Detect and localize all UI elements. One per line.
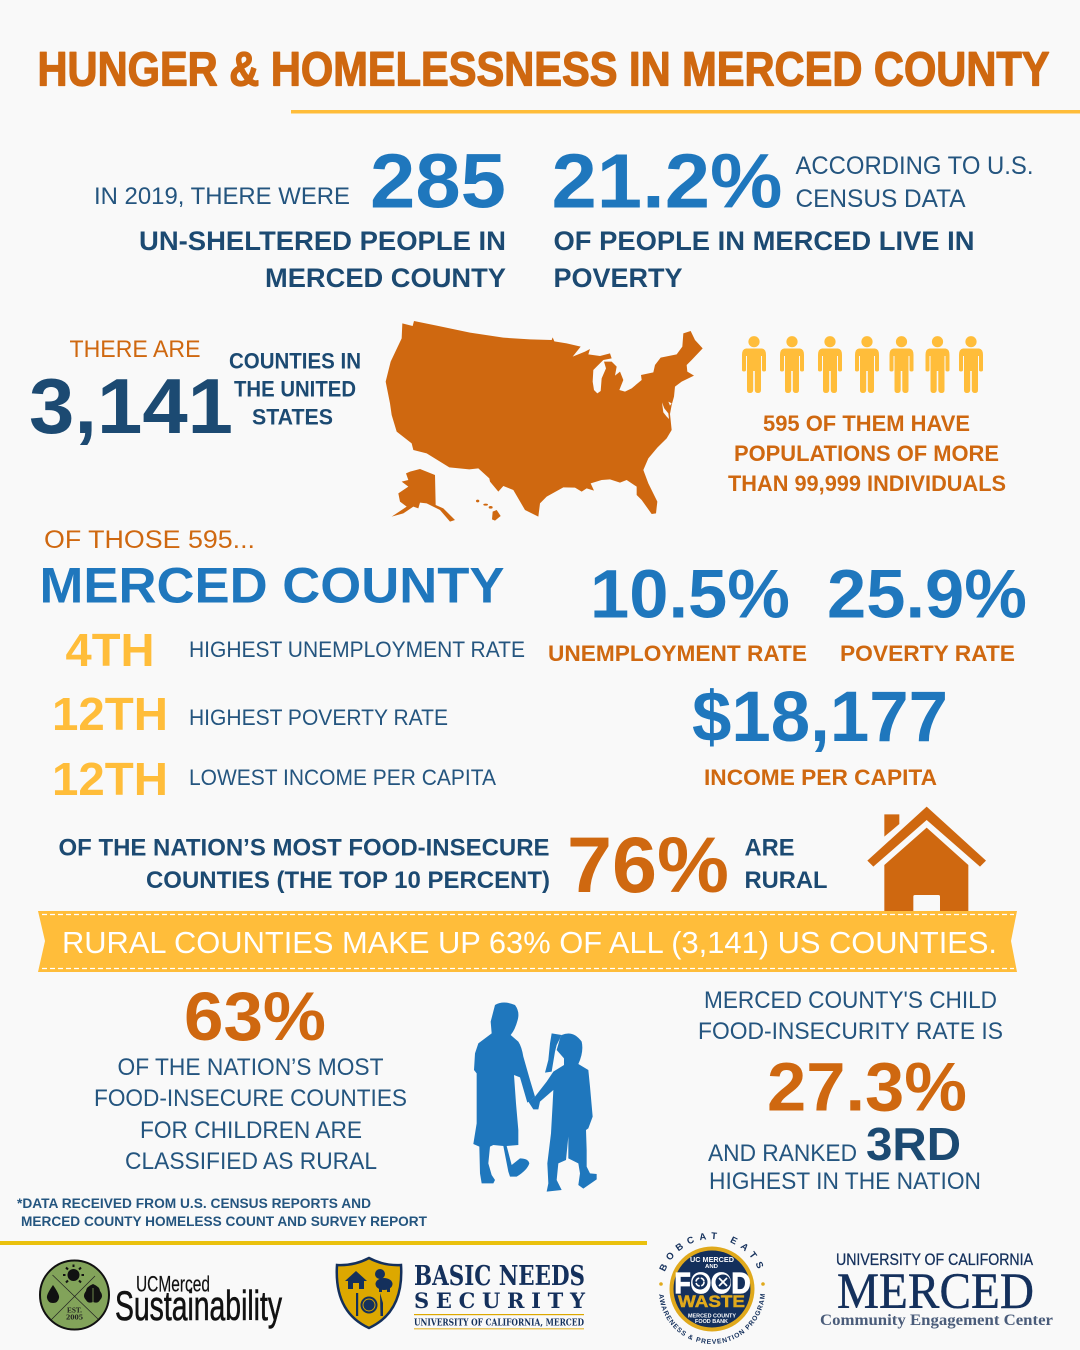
rank: 12th poverty: 12TH xyxy=(52,688,168,740)
banner: rural counties: RURAL COUNTIES MAKE UP 63% OF ALL (3,141) US COUNTIES. xyxy=(62,925,997,960)
stat: 76% rural: OF THE NATION’S MOST FOOD-INSECURE xyxy=(58,834,550,862)
logo: UC Merced Sustainability: UCMerced xyxy=(136,1272,210,1296)
text: 595 counties: THAN 99,999 INDIVIDUALS xyxy=(728,471,1006,496)
logo: Bobcat Eats Food Waste xyxy=(659,1232,765,1344)
logo: Basic Needs Security: SECURITY xyxy=(414,1288,586,1313)
stat: 3,141 counties: COUNTIES IN xyxy=(229,348,361,374)
stat: 25.9% poverty xyxy=(827,556,1027,666)
rank: 12th income xyxy=(52,753,496,805)
logo: Bobcat Eats Food Waste: UC MERCED xyxy=(690,1255,735,1264)
logo: UC Merced Community Engagement Center: UNIVERSITY OF CALIFORNIA xyxy=(836,1250,1034,1269)
logo: UC Merced Sustainability: Sustainability xyxy=(115,1282,282,1329)
panel: Merced County rankings xyxy=(40,526,525,805)
illustration: two children holding hands xyxy=(473,1002,597,1192)
stat: 63% of child food-insecure counties: CLASSIFIED AS RURAL xyxy=(125,1148,377,1175)
logo: UC Merced Sustainability: 2005 xyxy=(66,1314,84,1322)
stat: 76% rural: 76% xyxy=(567,820,729,909)
logo: Bobcat Eats Food Waste: AND xyxy=(705,1264,718,1270)
logo: Basic Needs Security: UNIVERSITY OF CALIFORNIA, MERCED xyxy=(414,1318,584,1328)
stat: 10.5% unemployment: UNEMPLOYMENT RATE xyxy=(548,641,807,666)
stat: 21.2% in poverty: 21.2% xyxy=(552,138,782,224)
rank: 4th unemployment: HIGHEST UNEMPLOYMENT RATE xyxy=(189,637,525,662)
map of the United States xyxy=(386,321,703,522)
banner: rural counties xyxy=(38,911,1017,972)
stat: 21.2% in poverty: OF PEOPLE IN MERCED LIVE IN xyxy=(554,226,974,256)
rank: 12th poverty: HIGHEST POVERTY RATE xyxy=(189,705,448,730)
stat: 3,141 counties: THERE ARE xyxy=(70,336,200,363)
stat: 63% of child food-insecure counties: 63% xyxy=(184,978,326,1055)
rank: 4th unemployment: 4TH xyxy=(66,624,154,676)
logo: Bobcat Eats Food Waste: AWARENESS & PREVENTION PROGRAM xyxy=(659,1294,765,1344)
stat: 3,141 counties: 3,141 xyxy=(29,362,233,450)
stat: 3,141 counties: THE UNITED xyxy=(234,376,356,402)
stat: 76% rural: ARE xyxy=(744,834,794,862)
stat: 285 unsheltered people xyxy=(94,138,506,293)
logo: Bobcat Eats Food Waste: WASTE xyxy=(678,1292,745,1311)
stat: 21.2% in poverty xyxy=(552,138,1034,293)
text: 595 counties: POPULATIONS OF MORE xyxy=(734,441,999,466)
logo: Bobcat Eats Food Waste: FOOD xyxy=(674,1268,750,1300)
stat: child food-insecurity 27.3%: 27.3% xyxy=(767,1048,967,1126)
footnote: data sources: MERCED COUNTY HOMELESS COUNT AND SURVEY REPORT xyxy=(21,1214,428,1229)
logo: UC Merced Community Engagement Center: Community Engagement Center xyxy=(820,1312,1053,1329)
logo: Bobcat Eats Food Waste: FOOD BANK xyxy=(695,1319,728,1325)
logo: UC Merced Community Engagement Center: MERCED xyxy=(837,1264,1034,1320)
stat: child food-insecurity 27.3% xyxy=(698,987,1003,1195)
stat: 3,141 counties: STATES xyxy=(252,404,333,430)
rank: 4th unemployment xyxy=(66,624,525,676)
footnote: data sources: *DATA RECEIVED FROM U.S. CENSUS REPORTS AND xyxy=(17,1196,371,1211)
stat: 285 unsheltered people: IN 2019, THERE WERE xyxy=(94,183,350,210)
heading: Merced County: MERCED COUNTY xyxy=(40,558,504,614)
stat: 25.9% poverty: 25.9% xyxy=(827,556,1027,632)
logo: Basic Needs Security: BASIC NEEDS xyxy=(414,1261,585,1292)
stat: 285 unsheltered people: 285 xyxy=(370,138,506,224)
stat: 25.9% poverty: POVERTY RATE xyxy=(840,641,1015,666)
rank: 12th poverty xyxy=(52,688,448,740)
stat: 21.2% in poverty: POVERTY xyxy=(554,263,682,293)
stat: 285 unsheltered people: UN-SHELTERED PEOPLE IN xyxy=(139,226,506,256)
stat: 21.2% in poverty: ACCORDING TO U.S. xyxy=(796,152,1034,180)
stat: 285 unsheltered people: MERCED COUNTY xyxy=(265,263,506,293)
footnote: data sources xyxy=(17,1196,428,1229)
logo: Bobcat Eats Food Waste: BOBCAT EATS xyxy=(659,1232,764,1272)
icon: house xyxy=(867,807,986,912)
logo: UC Merced Sustainability xyxy=(40,1260,282,1330)
heading: of those 595: OF THOSE 595... xyxy=(44,526,255,554)
logo: UC Merced Sustainability: EST. xyxy=(67,1306,82,1314)
logo: Bobcat Eats Food Waste: MERCED COUNTY xyxy=(688,1314,737,1320)
stat: 10.5% unemployment xyxy=(548,556,807,666)
logo: Basic Needs Security xyxy=(337,1258,586,1330)
stat: child food-insecurity 27.3%: FOOD-INSECURITY RATE IS xyxy=(698,1018,1003,1045)
stat: 63% of child food-insecure counties xyxy=(94,978,407,1175)
stat: child food-insecurity 27.3%: AND RANKED xyxy=(708,1140,857,1167)
stat: income per capita: $18,177 xyxy=(692,678,948,757)
stat: child food-insecurity 27.3%: 3RD xyxy=(866,1118,961,1170)
stat: 63% of child food-insecure counties: OF THE NATION’S MOST xyxy=(118,1054,384,1081)
rank: 12th income: LOWEST INCOME PER CAPITA xyxy=(189,765,496,790)
stat: child food-insecurity 27.3%: HIGHEST IN THE NATION xyxy=(709,1168,981,1195)
stat: 63% of child food-insecure counties: FOOD-INSECURE COUNTIES xyxy=(94,1085,407,1112)
stat: 63% of child food-insecure counties: FOR CHILDREN ARE xyxy=(140,1117,362,1144)
text: 595 counties xyxy=(728,411,1006,496)
rank: 12th income: 12TH xyxy=(52,753,168,805)
stat: child food-insecurity 27.3%: MERCED COUNTY'S CHILD xyxy=(704,987,997,1014)
text: 595 counties: 595 OF THEM HAVE xyxy=(763,411,970,436)
stat: 76% rural xyxy=(58,820,828,909)
stat: 76% rural: COUNTIES (THE TOP 10 PERCENT) xyxy=(146,867,550,894)
stat: 76% rural: RURAL xyxy=(744,867,828,894)
stat: income per capita: INCOME PER CAPITA xyxy=(704,765,937,790)
logo: UC Merced Community Engagement Center xyxy=(820,1250,1053,1329)
icon row: seven people xyxy=(742,336,983,393)
stat: 3,141 counties xyxy=(29,336,361,450)
stat: 21.2% in poverty: CENSUS DATA xyxy=(796,185,966,213)
stat: 10.5% unemployment: 10.5% xyxy=(590,556,790,632)
